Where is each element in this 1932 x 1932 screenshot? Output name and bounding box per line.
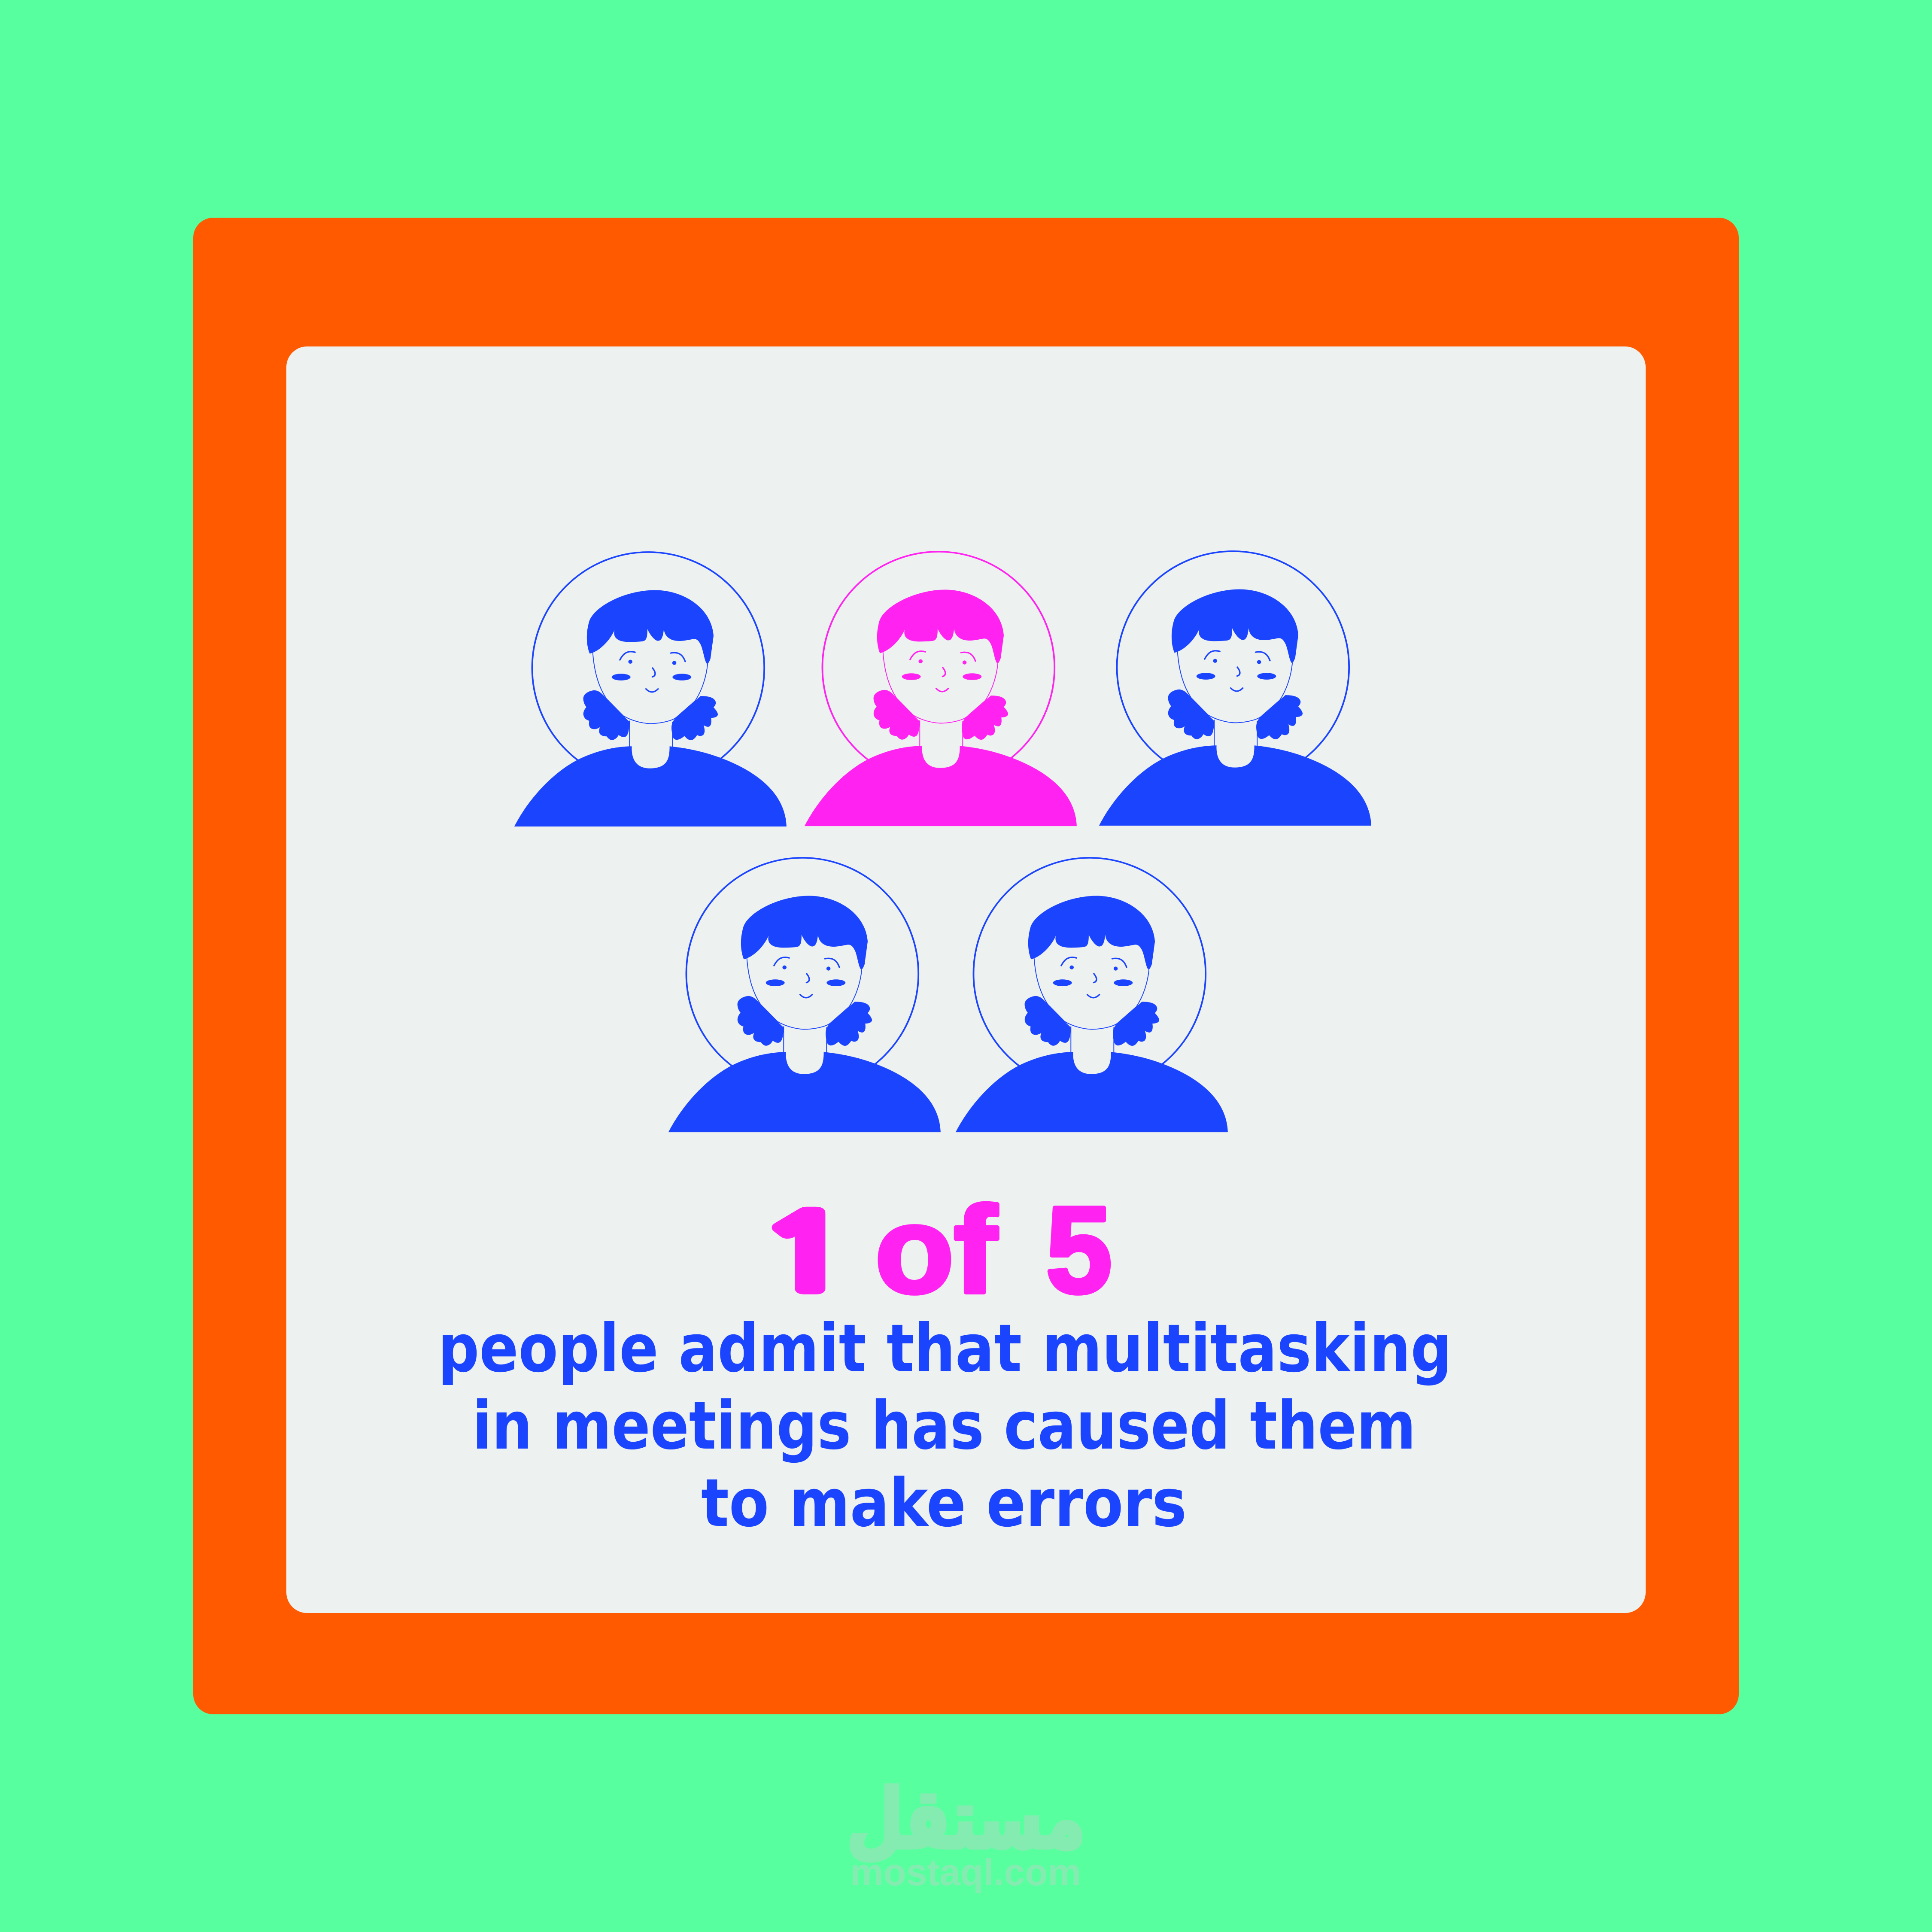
hair — [587, 590, 714, 664]
hair — [1172, 589, 1298, 663]
neck lines — [1214, 720, 1257, 747]
line 3: to make errors — [701, 1465, 1187, 1542]
facial features — [1053, 957, 1133, 998]
neck lines — [629, 721, 672, 747]
body with neck notch — [956, 1052, 1228, 1132]
face outline — [593, 653, 708, 723]
watermark: mostaql logo — [847, 1771, 1085, 1893]
neck lines — [784, 1027, 826, 1053]
watermark arabic wordmark: مستقل — [847, 1771, 1085, 1867]
halo circle — [822, 552, 1054, 784]
face outline — [1034, 958, 1149, 1029]
person 5: blue — [956, 858, 1228, 1132]
right curls — [826, 1002, 872, 1046]
halo circle — [686, 858, 918, 1090]
face outline — [747, 958, 862, 1029]
facial features — [612, 652, 691, 692]
body with neck notch — [805, 746, 1077, 826]
right curls — [962, 696, 1008, 740]
body with neck notch — [514, 746, 787, 826]
hair — [741, 896, 868, 970]
watermark latin wordmark: mostaql.com — [850, 1851, 1081, 1893]
left curls — [1168, 690, 1214, 739]
body with neck notch — [668, 1052, 941, 1132]
face outline — [883, 652, 998, 723]
left curls — [1025, 996, 1071, 1046]
person 2: magenta highlighted — [805, 552, 1077, 826]
hair — [1028, 896, 1155, 970]
halo circle — [1117, 551, 1349, 783]
halo circle — [532, 552, 764, 784]
headline numeral 1: 1 — [758, 1203, 855, 1306]
face outline — [1178, 652, 1292, 723]
facial features — [1197, 651, 1276, 691]
neck lines — [920, 720, 963, 747]
person 4: blue — [668, 858, 941, 1132]
facial features — [766, 957, 845, 998]
panel: orange frame — [193, 218, 1739, 1714]
person 3: blue — [1099, 551, 1371, 826]
headline numeral 5: 5 — [1046, 1181, 1112, 1318]
left curls — [874, 690, 920, 740]
panel: light content card — [286, 346, 1646, 1613]
right curls — [1113, 1002, 1159, 1046]
left curls — [738, 996, 784, 1046]
right curls — [1256, 695, 1303, 739]
headline: 1 of 5 — [758, 1181, 1112, 1318]
headline word of: of — [875, 1181, 998, 1318]
left curls — [583, 690, 629, 740]
neck lines — [1071, 1027, 1114, 1053]
hair — [877, 590, 1004, 664]
facial features — [902, 651, 981, 692]
halo circle — [973, 858, 1206, 1090]
line 2: in meetings has caused them — [472, 1388, 1416, 1464]
body with neck notch — [1099, 745, 1371, 826]
statement text — [438, 1310, 1452, 1542]
right curls — [671, 696, 718, 740]
person 1: blue — [514, 552, 787, 826]
line 1: people admit that multitasking — [438, 1310, 1452, 1387]
